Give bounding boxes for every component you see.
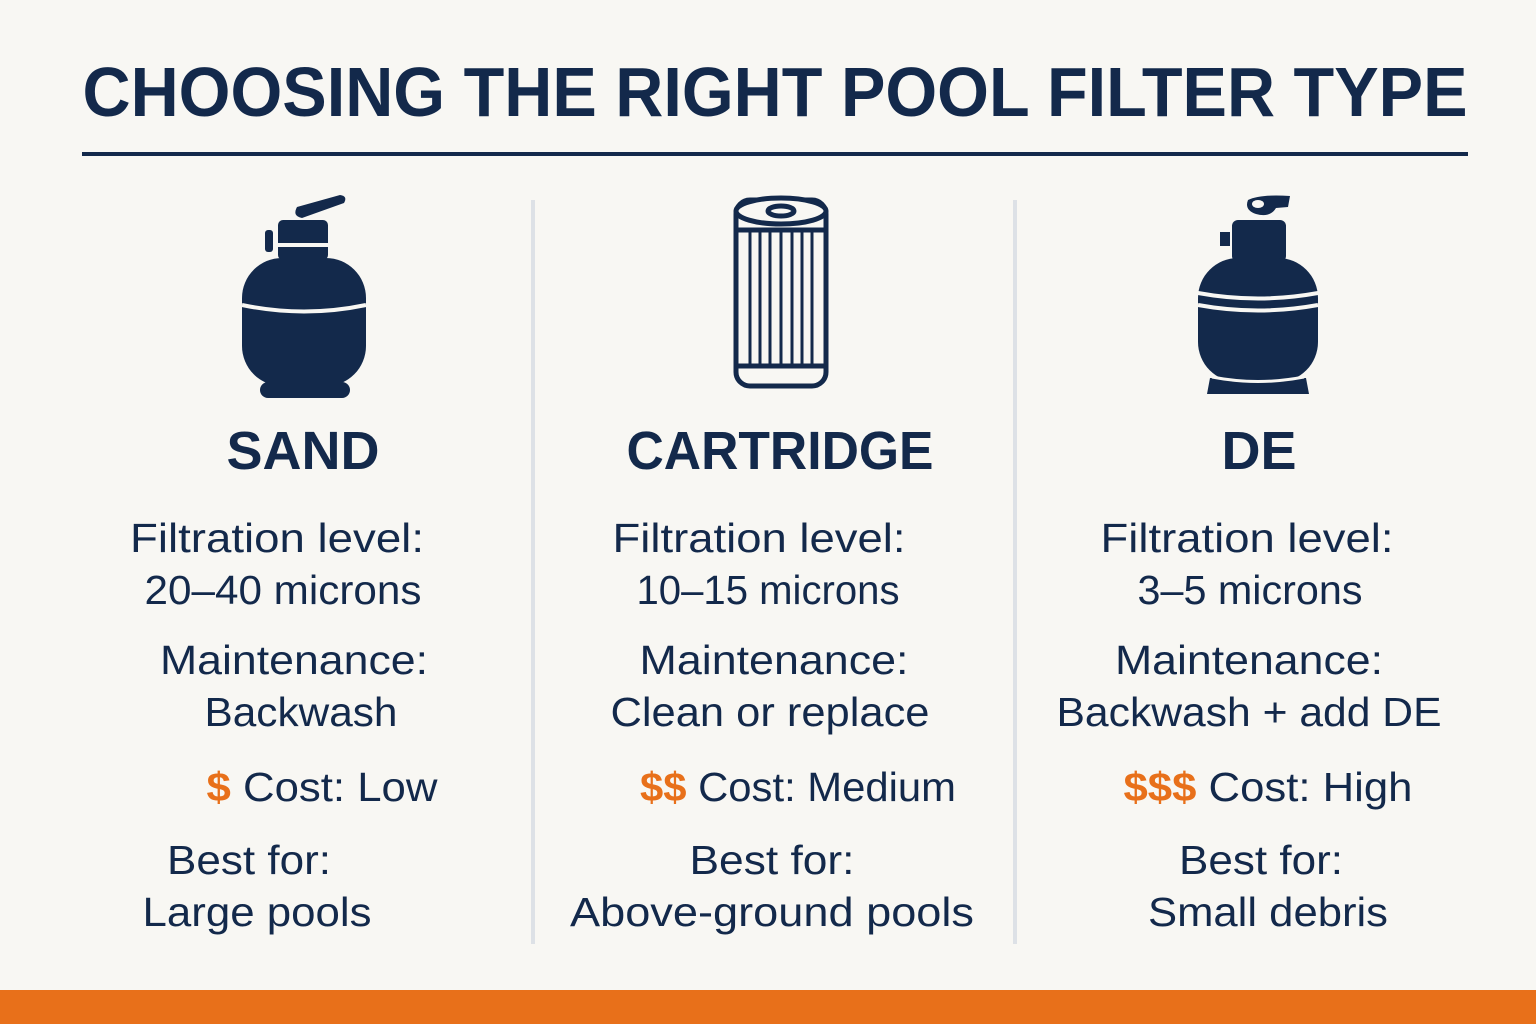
icon: cartridge filter xyxy=(736,198,826,386)
text block: sand details xyxy=(130,515,438,935)
text block: cartridge details: 10–15 microns xyxy=(636,567,900,613)
text block: cartridge details: Maintenance: xyxy=(640,637,908,683)
text block: sand details: Large pools xyxy=(142,889,372,935)
panel: DE xyxy=(1056,196,1442,935)
text block: sand details: $ Cost: Low xyxy=(206,764,438,810)
text block: DE details: Filtration level: xyxy=(1100,515,1394,561)
footer bar xyxy=(0,990,1536,1024)
text block: cartridge details: Filtration level: xyxy=(612,515,906,561)
heading: DE: DE xyxy=(1221,421,1297,481)
text block: DE details: Maintenance: xyxy=(1115,637,1383,683)
text block: cartridge details: Clean or replace xyxy=(610,689,930,735)
text block: cartridge details xyxy=(570,515,974,935)
title: CHOOSING THE RIGHT POOL FILTER TYPE xyxy=(82,53,1468,131)
heading: cartridge: CARTRIDGE xyxy=(626,421,934,481)
text block: cartridge details: $$ Cost: Medium xyxy=(640,764,956,810)
text block: cartridge details: Best for: xyxy=(690,837,854,883)
icon: sand filter xyxy=(242,195,366,398)
text block: sand details: Backwash xyxy=(204,689,398,735)
panel: cartridge xyxy=(570,198,974,935)
text block: DE details: Best for: xyxy=(1179,837,1343,883)
text block: DE details: 3–5 microns xyxy=(1138,567,1362,613)
text block: sand details: Filtration level: xyxy=(130,515,424,561)
text block: cartridge details: Above-ground pools xyxy=(570,889,974,935)
icon: DE filter xyxy=(1198,196,1318,394)
text block: sand details: Maintenance: xyxy=(160,637,428,683)
heading: sand: SAND xyxy=(226,421,380,481)
text block: sand details: Best for: xyxy=(167,837,331,883)
text block: DE details: Small debris xyxy=(1148,889,1388,935)
text block: DE details xyxy=(1056,515,1442,935)
panel: sand xyxy=(130,195,438,935)
text block: DE details: Backwash + add DE xyxy=(1056,689,1442,735)
text block: sand details: 20–40 microns xyxy=(144,567,422,613)
text block: DE details: $$$ Cost: High xyxy=(1124,764,1412,810)
